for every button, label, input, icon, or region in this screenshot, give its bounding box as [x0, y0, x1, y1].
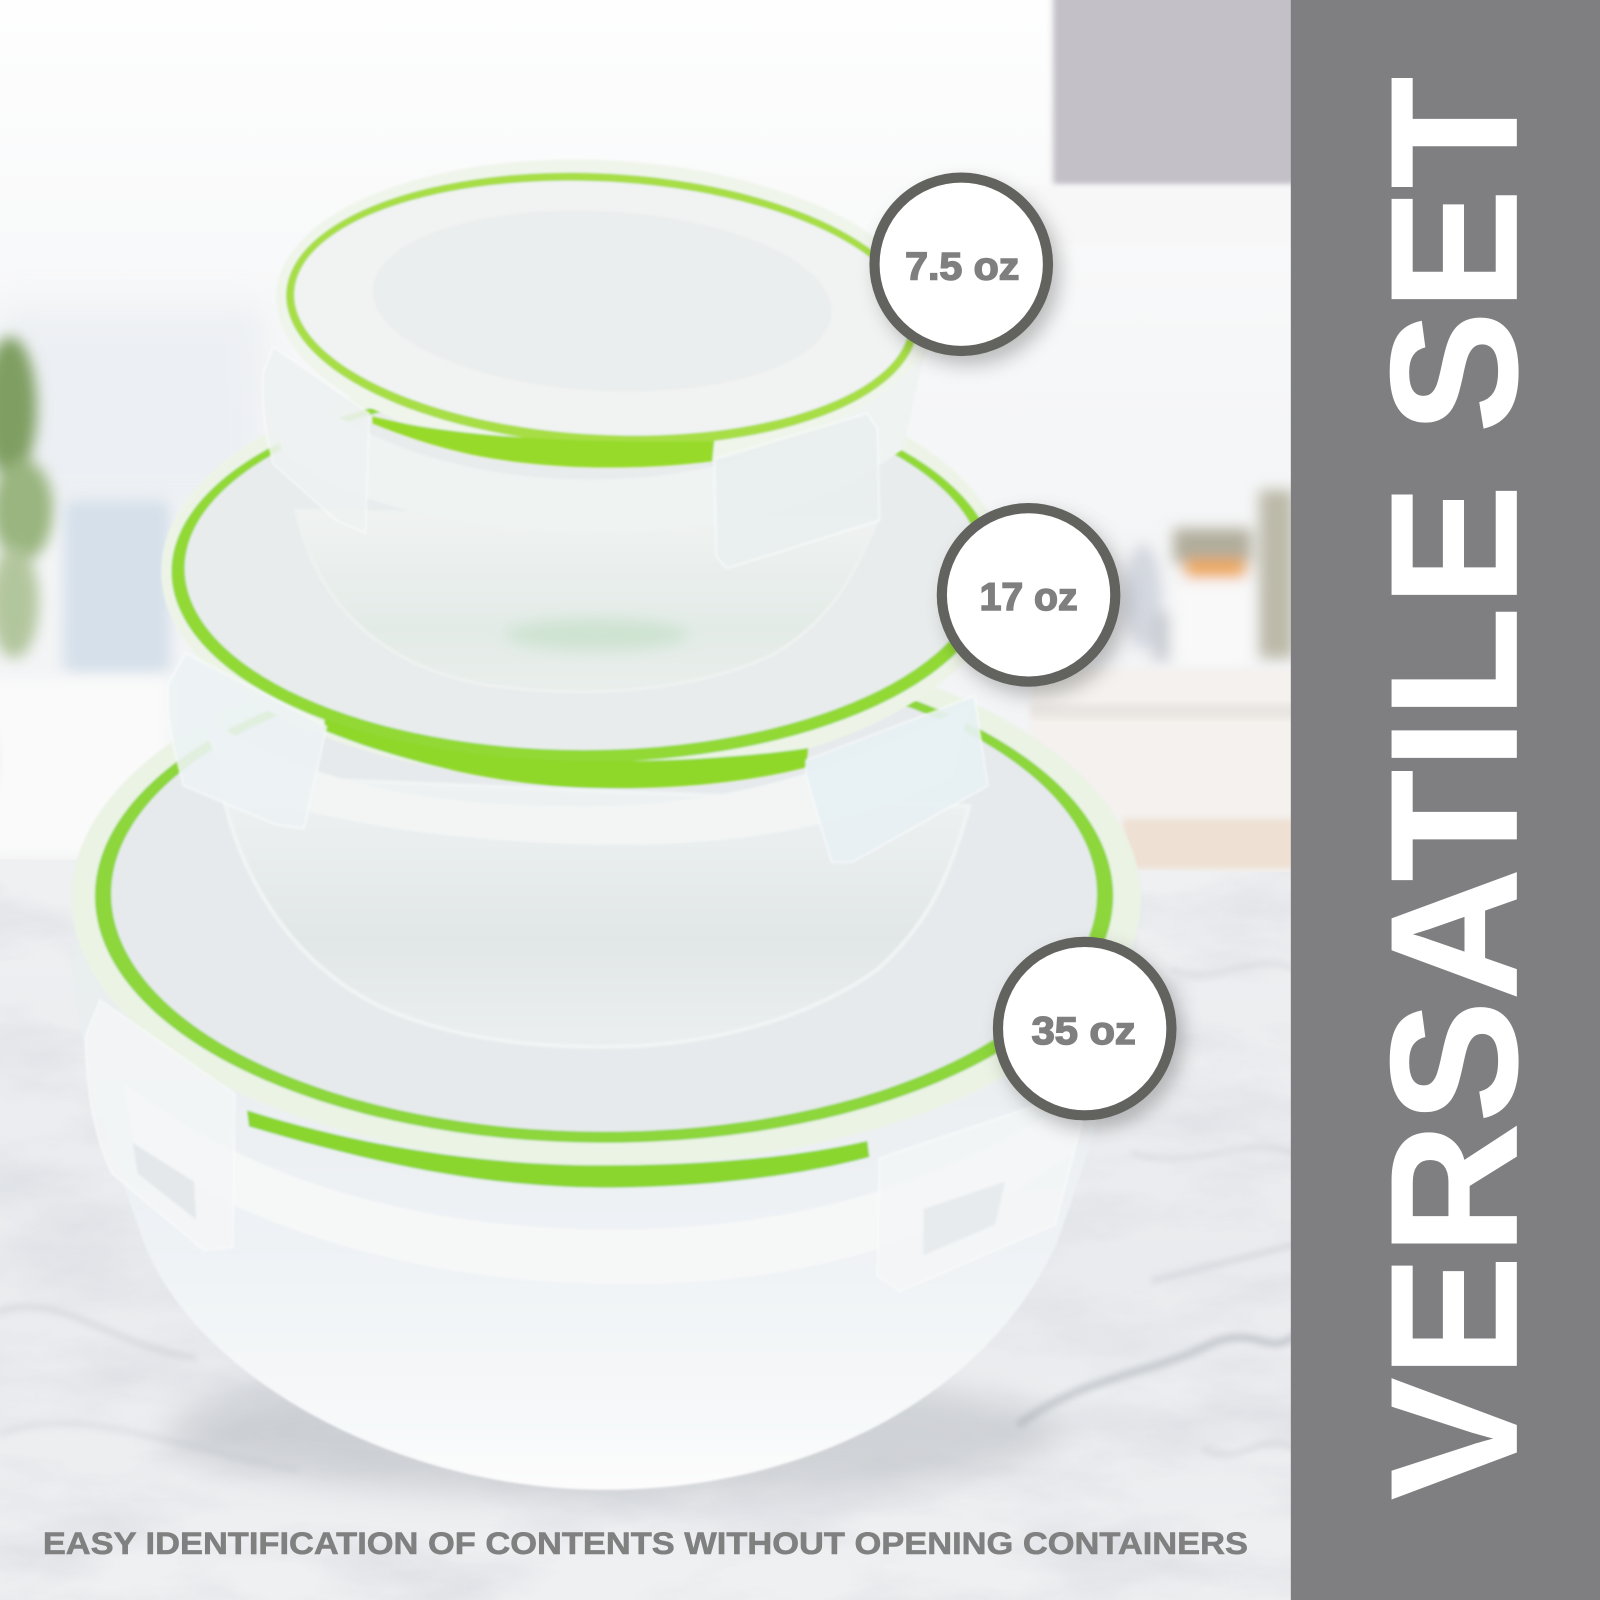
- lid rim: [71, 631, 1141, 1165]
- blurred kitchen background: [0, 0, 1299, 878]
- counter left: [0, 679, 168, 857]
- lower gasket: [324, 719, 808, 788]
- inner lid: [288, 166, 916, 451]
- inner lid: [111, 656, 1097, 1132]
- bowl: [71, 934, 1139, 1490]
- gasket: [279, 157, 925, 461]
- size badge: 35 oz: 35 oz: [1032, 1010, 1136, 1053]
- size badge: 17 oz: [942, 508, 1115, 682]
- small container 7.5 oz: [263, 143, 940, 692]
- left clip: [263, 347, 369, 533]
- size badge: 7.5 oz: [874, 178, 1048, 351]
- right clip window: [923, 1182, 1005, 1255]
- lid rim: [268, 143, 940, 479]
- size badge: 17 oz: 17 oz: [980, 576, 1078, 619]
- large container 35 oz: [71, 631, 1141, 1490]
- shelf items: [1124, 490, 1294, 667]
- lid skirt: [199, 704, 969, 845]
- gasket: [171, 381, 996, 762]
- right clip: [878, 1097, 1082, 1291]
- bowl: [296, 510, 878, 692]
- lower gasket: [247, 1110, 869, 1188]
- marble veins: [0, 963, 1294, 1469]
- container shadow: [163, 1370, 1061, 1497]
- marble mottling: [0, 872, 1291, 1600]
- right clip: [806, 696, 988, 862]
- gasket: [95, 649, 1113, 1143]
- left clip: [86, 1000, 235, 1250]
- right clip: [714, 413, 880, 568]
- lid skirt: [122, 1082, 1092, 1284]
- wall cabinet: [1053, 0, 1298, 186]
- size badge: 35 oz: [998, 942, 1171, 1115]
- bowl: [219, 776, 969, 1047]
- left wall tint: [0, 306, 265, 510]
- marble countertop: [0, 859, 1294, 1600]
- left clip: [168, 653, 327, 829]
- lid skirt: [267, 357, 923, 533]
- wood trim: [1122, 818, 1298, 869]
- panel heading: VERSATILE SET: [1353, 77, 1555, 1500]
- left clip window: [133, 1143, 196, 1219]
- shelf: [1026, 186, 1299, 245]
- plant: [0, 337, 55, 791]
- medium container 17 oz: [161, 362, 1006, 1047]
- bowl green reflection: [505, 618, 689, 651]
- lower gasket: [372, 416, 714, 468]
- inner lid: [185, 387, 983, 750]
- side panel: [1291, 0, 1600, 1600]
- caption: EASY IDENTIFICATION OF CONTENTS WITHOUT OPENING CONTAINERS: [43, 1525, 1248, 1561]
- appliance: [63, 500, 170, 673]
- lid rim: [161, 362, 1006, 781]
- inner lid recess: [368, 199, 836, 403]
- counter edge: [1031, 704, 1298, 718]
- size badge: 7.5 oz: 7.5 oz: [905, 246, 1019, 289]
- lower counter: [1031, 668, 1298, 816]
